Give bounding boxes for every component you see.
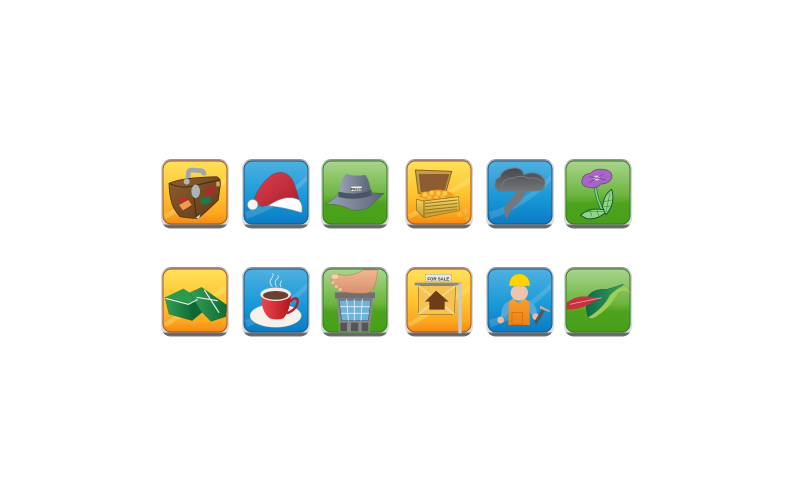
suitcase — [169, 170, 220, 219]
icon tile: santa hat — [242, 159, 310, 228]
icon tile: flower — [564, 159, 632, 228]
icon tile: foot on shopping cart — [321, 267, 389, 336]
house for sale sign: FOR SALE — [427, 276, 450, 282]
icon tile: green gift box — [161, 267, 229, 336]
feathered cap — [567, 284, 630, 318]
press fedora: PRESS — [351, 187, 363, 191]
tornado — [495, 168, 545, 219]
icon tile: press fedora — [321, 159, 389, 228]
icon tile: coffee cup — [242, 267, 310, 336]
icon tile: tornado — [486, 159, 554, 228]
green gift box — [165, 287, 227, 321]
foot on shopping cart — [331, 270, 377, 332]
coffee cup — [250, 273, 301, 327]
icon tile: construction worker — [486, 267, 554, 336]
santa hat — [247, 172, 302, 213]
treasure chest — [415, 170, 469, 221]
icon tile: feathered cap — [564, 267, 632, 336]
construction worker — [497, 274, 551, 325]
icon tile: treasure chest — [405, 159, 473, 228]
icon tile: suitcase — [161, 159, 229, 228]
flower — [581, 169, 613, 219]
icon tile: house for sale — [405, 267, 473, 336]
